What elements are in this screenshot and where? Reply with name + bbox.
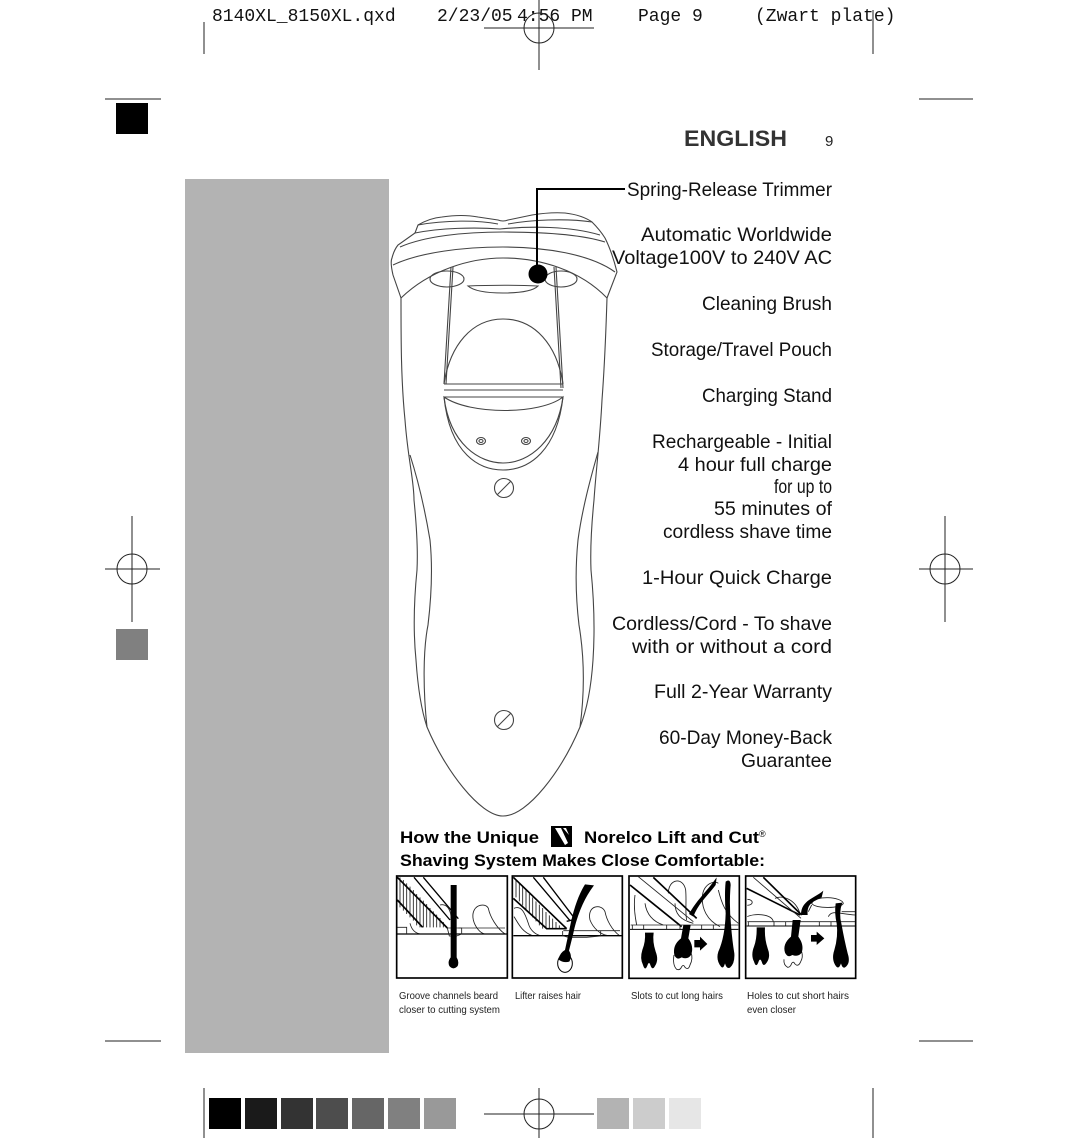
section heading: lift and cut: Norelco Lift and Cut: [584, 828, 759, 847]
feature list: Spring-Release Trimmer: [627, 179, 832, 201]
shaver front panel: [444, 267, 563, 470]
feature list: with or without a cord: [631, 636, 832, 658]
icon: Norelco logo: [551, 826, 572, 847]
shaver body outline: [401, 298, 607, 816]
gray side panel: [185, 179, 389, 1053]
print slug header: Page: [638, 7, 681, 27]
registration mark: left: [105, 516, 160, 622]
feature list: Full 2-Year Warranty: [654, 681, 832, 703]
feature list: Storage/Travel Pouch: [651, 339, 832, 361]
gray registration square: [116, 629, 148, 660]
print slug header: (Zwart plate): [755, 7, 895, 27]
feature list: 60-Day Money-Back: [659, 727, 832, 749]
caption: slots to cut long hairs: Slots to cut long hairs: [631, 990, 723, 1002]
feature list: Charging Stand: [702, 385, 832, 407]
shaver line drawing: [391, 213, 617, 816]
registration mark: bottom: [484, 1088, 594, 1138]
heading: English with page number: ENGLISH: [684, 126, 787, 151]
leader line to trimmer: [528, 189, 625, 284]
caption: lifter raises hair: Lifter raises hair: [515, 990, 581, 1002]
section heading: lift and cut: [400, 828, 766, 870]
feature list: cordless shave time: [663, 521, 832, 543]
print slug header: 2/23/05: [437, 7, 513, 27]
print slug header: [212, 7, 895, 27]
caption: holes to cut short hairs: even closer: [747, 1004, 796, 1016]
diagram: slots cut long hairs: [629, 876, 739, 978]
feature list: for up to: [774, 476, 832, 498]
feature list: Rechargeable - Initial: [652, 431, 832, 453]
registration mark: right: [919, 516, 973, 622]
feature list: Cleaning Brush: [702, 293, 832, 315]
diagram: groove channels beard: [397, 876, 507, 978]
caption: groove channels beard: Groove channels beard: [399, 990, 498, 1002]
section heading: lift and cut: Shaving System Makes Close Comfortable:: [400, 851, 765, 870]
heading: English with page number: [684, 126, 833, 151]
feature list: 1-Hour Quick Charge: [642, 567, 832, 589]
diagram: lifter raises hair: [512, 876, 622, 978]
black registration square: [116, 103, 148, 134]
feature list: Cordless/Cord - To shave: [612, 613, 832, 635]
caption: holes to cut short hairs: [747, 990, 849, 1016]
grayscale calibration bar: light: [597, 1098, 701, 1129]
section heading: lift and cut: ®: [759, 829, 766, 839]
caption: groove channels beard: closer to cutting system: [399, 1004, 500, 1016]
feature list: Automatic Worldwide: [641, 224, 832, 246]
section heading: lift and cut: How the Unique: [400, 828, 539, 847]
feature list: [612, 179, 833, 772]
feature list: 55 minutes of: [714, 498, 833, 520]
feature list: 4 hour full charge: [678, 454, 832, 476]
registration mark: top: [484, 0, 594, 70]
caption: groove channels beard: [399, 990, 500, 1016]
feature list: Guarantee: [741, 750, 832, 772]
heading: English with page number: 9: [825, 133, 833, 150]
shaver head: [391, 213, 617, 298]
screw: upper: [494, 478, 514, 498]
feature list: Voltage100V to 240V AC: [612, 247, 832, 269]
screw: lower: [494, 710, 514, 730]
crop marks: [105, 10, 973, 1138]
print slug header: 4:56 PM: [517, 7, 593, 27]
diagram: holes cut short hairs: [746, 876, 856, 978]
print slug header: 9: [692, 7, 703, 27]
caption: holes to cut short hairs: Holes to cut short hairs: [747, 990, 849, 1002]
grayscale calibration bar: dark: [209, 1098, 456, 1129]
print slug header: 8140XL_8150XL.qxd: [212, 7, 396, 27]
